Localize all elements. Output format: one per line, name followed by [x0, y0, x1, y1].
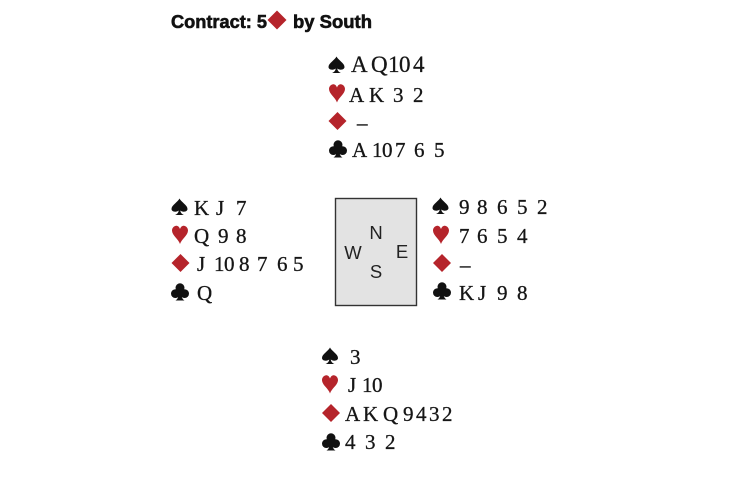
north diamonds: – [356, 111, 368, 135]
west diamonds: J108765 [197, 252, 304, 276]
compass box [336, 198, 416, 306]
title: contract [171, 10, 372, 32]
title: contract: by South [293, 11, 372, 32]
title: contract: Contract: 5 [171, 11, 267, 32]
south clubs: 432 [345, 430, 396, 454]
east diamonds: – [459, 253, 471, 277]
east spades: 98652 [459, 195, 548, 219]
west hand [171, 196, 304, 305]
east hand [432, 195, 548, 305]
compass box: W [344, 242, 362, 263]
south spades: 3 [350, 345, 360, 369]
east clubs: KJ98 [459, 281, 528, 305]
east hearts: 7654 [459, 224, 528, 248]
south hand [322, 345, 452, 454]
south hearts: J10 [348, 373, 382, 397]
south diamonds: AKQ9432 [345, 402, 452, 426]
north clubs: A10765 [352, 138, 444, 162]
north hearts: AK32 [349, 83, 424, 107]
compass box: E [396, 241, 408, 262]
west clubs: Q [197, 281, 212, 305]
west hearts: Q98 [194, 224, 246, 248]
north hand [328, 52, 444, 162]
compass box: N [369, 222, 383, 243]
compass box: S [370, 261, 382, 282]
north spades: AQ104 [351, 52, 425, 77]
west spades: KJ7 [194, 196, 246, 220]
